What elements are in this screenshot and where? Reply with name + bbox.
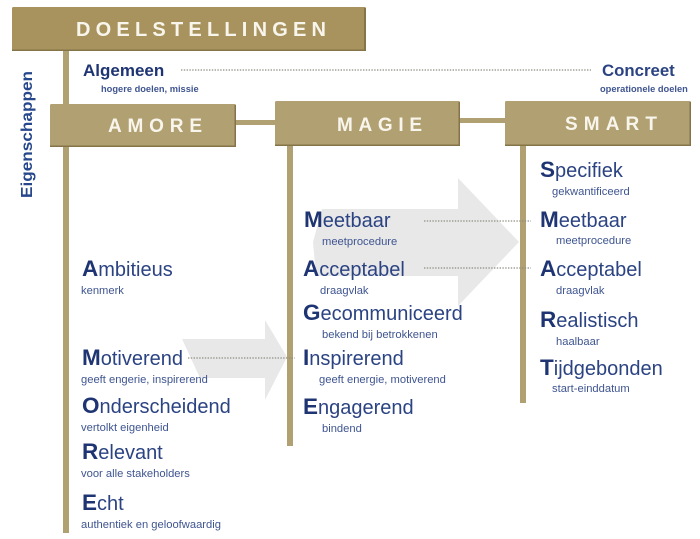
item: Inspirerend: geeft energie, motiverend	[319, 374, 446, 386]
item: Ambitieus: kenmerk	[81, 285, 124, 297]
header: DOELSTELLINGEN: DOELSTELLINGEN	[76, 19, 326, 41]
item: Engagerend: Engagerend	[303, 394, 414, 419]
dotted link: Motiverend to Inspirerend	[188, 357, 295, 359]
item: Gecommuniceerd: bekend bij betrokkenen	[322, 329, 438, 341]
header: SMART	[505, 101, 691, 146]
label: Algemeen: hogere doelen, missie	[101, 84, 199, 94]
connector: MAGIE to SMART	[460, 118, 505, 123]
item: Meetbaar: meetprocedure	[556, 235, 631, 247]
label: Concreet: operationele doelen	[600, 84, 688, 94]
item: Onderscheidend: Onderscheidend	[82, 393, 231, 418]
dotted link: Acceptabel to Acceptabel	[424, 267, 531, 269]
label: Algemeen	[83, 61, 199, 94]
item: Realistisch: Realistisch	[540, 307, 639, 332]
item: Onderscheidend: vertolkt eigenheid	[81, 422, 169, 434]
item: Motiverend: geeft engerie, inspirerend	[81, 374, 208, 386]
item: Engagerend	[303, 394, 414, 435]
item: Realistisch	[540, 307, 639, 348]
item: Relevant	[81, 439, 190, 480]
item: Inspirerend: Inspirerend	[303, 345, 404, 370]
header: SMART: SMART	[565, 114, 657, 135]
label: Algemeen: Algemeen	[83, 61, 164, 80]
item: Acceptabel: Acceptabel	[303, 256, 405, 281]
item: Tijdgebonden: start-einddatum	[552, 383, 630, 395]
SMART list	[540, 157, 663, 395]
axis label: Eigenschappen: Eigenschappen	[19, 71, 36, 198]
AMORE list	[81, 256, 231, 531]
label: Concreet: Concreet	[602, 61, 675, 80]
item: Onderscheidend	[81, 393, 231, 434]
dotted link: Meetbaar to Meetbaar	[424, 220, 531, 222]
item: Meetbaar: Meetbaar	[304, 207, 391, 232]
item: Motiverend: Motiverend	[82, 345, 183, 370]
item: Acceptabel: draagvlak	[556, 285, 605, 297]
header: MAGIE: MAGIE	[337, 115, 422, 136]
item: Ambitieus: Ambitieus	[82, 256, 173, 281]
item: Acceptabel	[303, 256, 405, 297]
item: Engagerend: bindend	[322, 423, 362, 435]
item: Echt	[81, 490, 221, 531]
connector: AMORE to MAGIE	[236, 120, 275, 125]
header: MAGIE	[275, 101, 460, 146]
item: Echt: authentiek en geloofwaardig	[81, 519, 221, 531]
vertical line: SMART column	[520, 145, 526, 403]
item: Acceptabel: Acceptabel	[540, 256, 642, 281]
vertical line: AMORE column	[63, 51, 69, 533]
item: Echt: Echt	[82, 490, 124, 515]
header: DOELSTELLINGEN	[12, 7, 366, 51]
item: Tijdgebonden	[540, 355, 663, 395]
item: Acceptabel	[540, 256, 642, 297]
MAGIE list	[303, 207, 463, 435]
item: Meetbaar	[304, 207, 397, 248]
item: Relevant: Relevant	[82, 439, 163, 464]
item: Specifiek: Specifiek	[540, 157, 624, 182]
item: Meetbaar: Meetbaar	[540, 207, 627, 232]
item: Realistisch: haalbaar	[556, 336, 600, 348]
item: Meetbaar	[540, 207, 631, 247]
dotted scale: Algemeen to Concreet	[181, 69, 591, 71]
label: Concreet	[600, 61, 688, 94]
item: Acceptabel: draagvlak	[320, 285, 369, 297]
item: Relevant: voor alle stakeholders	[81, 468, 190, 480]
vertical line: MAGIE column	[287, 146, 293, 446]
item: Ambitieus	[81, 256, 173, 297]
item: Inspirerend	[303, 345, 446, 386]
item: Motiverend	[81, 345, 208, 386]
item: Tijdgebonden: Tijdgebonden	[540, 355, 663, 380]
arrow: large grey MAGIE to SMART	[313, 178, 519, 306]
item: Meetbaar: meetprocedure	[322, 236, 397, 248]
item: Specifiek	[540, 157, 630, 198]
header: AMORE	[50, 104, 236, 147]
item: Specifiek: gekwantificeerd	[552, 186, 630, 198]
arrow: small grey AMORE to MAGIE	[182, 320, 287, 400]
item: Gecommuniceerd	[303, 300, 463, 341]
item: Gecommuniceerd: Gecommuniceerd	[303, 300, 463, 325]
header: AMORE: AMORE	[108, 116, 202, 137]
